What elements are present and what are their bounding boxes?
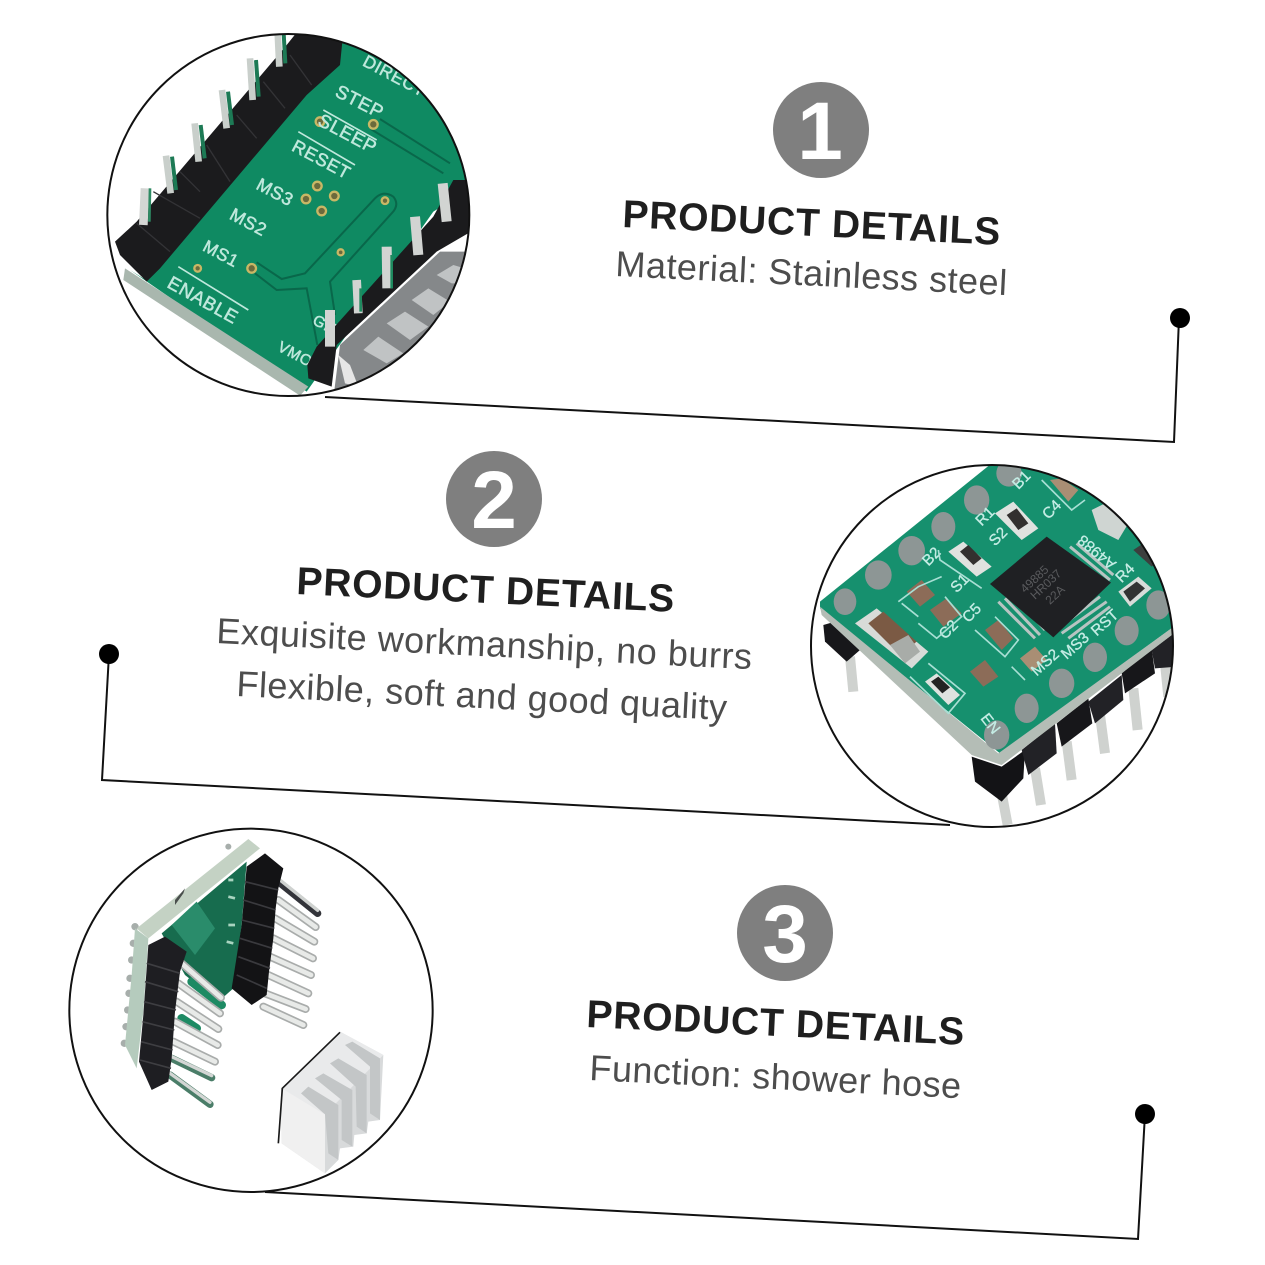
silkscreen labels: MS2 bbox=[1028, 646, 1063, 680]
left header bbox=[139, 937, 187, 1090]
step 3 block bbox=[586, 885, 965, 1106]
heat sink bbox=[278, 1032, 383, 1173]
silkscreen labels: B2 bbox=[919, 544, 944, 569]
silkscreen labels: MS3 bbox=[1058, 629, 1093, 663]
number badge 1: 1 bbox=[797, 86, 843, 177]
step 2 block bbox=[216, 451, 753, 728]
IC chip: 22A bbox=[1042, 582, 1068, 607]
silkscreen labels: C4 bbox=[1039, 497, 1065, 523]
IC chip: HR037 bbox=[1027, 566, 1065, 602]
number badge 2 bbox=[446, 451, 542, 547]
panel: circular photo 1, board close-up bbox=[107, 28, 477, 398]
step 1 block bbox=[615, 82, 1008, 303]
silkscreen labels: ENABLE bbox=[164, 272, 242, 328]
resistors and capacitors bbox=[855, 478, 1165, 705]
left pin header bbox=[115, 28, 343, 282]
silkscreen labels bbox=[164, 51, 430, 371]
IC chip: 49885 bbox=[1017, 562, 1052, 596]
silkscreen labels: RESET bbox=[289, 136, 354, 183]
description 3: Function: shower hose bbox=[589, 1047, 962, 1106]
silkscreen labels: MS3 bbox=[253, 174, 297, 210]
right pin header bbox=[307, 180, 477, 387]
silkscreen labels: VMO bbox=[275, 339, 315, 371]
silkscreen labels: S2 bbox=[986, 524, 1011, 549]
silkscreen labels: B1 bbox=[1009, 468, 1034, 493]
silkscreen labels bbox=[898, 468, 1139, 738]
silkscreen labels: EN bbox=[977, 710, 1003, 738]
number badge 2: 2 bbox=[471, 455, 517, 546]
pins right bbox=[263, 880, 318, 1025]
right header bbox=[232, 853, 283, 1005]
heading 3: PRODUCT DETAILS bbox=[586, 993, 965, 1054]
solder pads bbox=[194, 117, 388, 273]
PCB surface bbox=[820, 463, 1178, 753]
connector line 3 with dot bbox=[265, 1104, 1155, 1239]
silkscreen labels: MS2 bbox=[226, 204, 270, 240]
silkscreen labels: S1 bbox=[947, 571, 973, 596]
silkscreen labels: SLEEP bbox=[315, 109, 381, 158]
heading 2: PRODUCT DETAILS bbox=[296, 560, 675, 621]
connector line 1 with dot bbox=[325, 308, 1190, 442]
heading 1: PRODUCT DETAILS bbox=[622, 193, 1001, 254]
board end view bbox=[121, 839, 260, 1068]
heat sink bbox=[334, 252, 464, 389]
silkscreen labels: RST bbox=[1088, 606, 1123, 640]
PCB edge bbox=[820, 607, 1178, 765]
description 2, line 1: Exquisite workmanship, no burrs bbox=[216, 610, 753, 677]
number badge 3: 3 bbox=[762, 889, 808, 980]
silkscreen labels: C5 bbox=[959, 600, 985, 626]
silkscreen labels: R1 bbox=[972, 504, 998, 529]
number badge 3 bbox=[737, 885, 833, 981]
description 1: Material: Stainless steel bbox=[615, 243, 1008, 303]
silkscreen labels: DIRECT bbox=[360, 51, 430, 101]
silkscreen labels: MS1 bbox=[200, 236, 242, 271]
IC chip bbox=[990, 537, 1113, 638]
silkscreen labels: C2 bbox=[936, 617, 962, 643]
PCB surface bbox=[130, 28, 477, 392]
panel: circular photo 2, board top view bbox=[811, 460, 1178, 827]
description 2, line 2: Flexible, soft and good quality bbox=[236, 663, 728, 728]
connector line 2 with dot bbox=[99, 644, 950, 825]
copper traces bbox=[255, 119, 450, 345]
silkscreen labels: STEP bbox=[332, 81, 388, 123]
silkscreen labels: GN bbox=[310, 312, 339, 338]
silkscreen labels: R4 bbox=[1112, 560, 1139, 586]
silkscreen labels: A4988 bbox=[1075, 531, 1120, 573]
PCB edge bbox=[123, 268, 308, 396]
panel: circular photo 3, board with pins and heat sink bbox=[69, 829, 433, 1192]
pins left bbox=[170, 963, 222, 1104]
pin headers and legs bbox=[823, 622, 1178, 825]
solder joints bbox=[834, 460, 1170, 750]
number badge 1 bbox=[773, 82, 869, 178]
